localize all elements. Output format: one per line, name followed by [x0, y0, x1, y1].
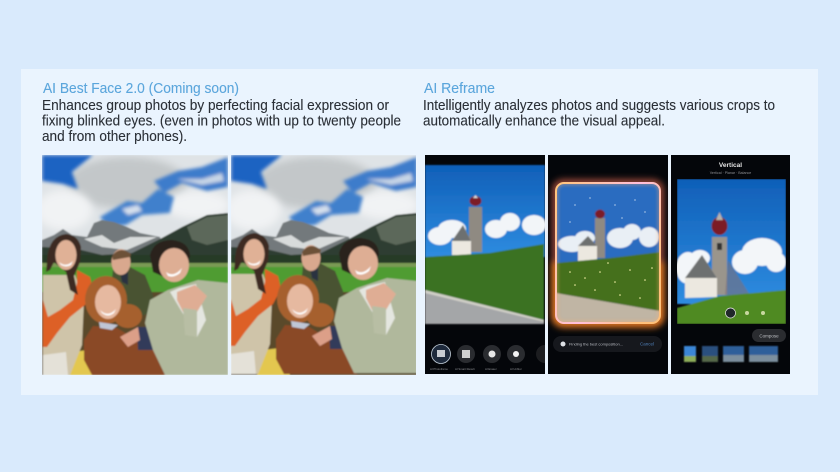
panel: feature card: [21, 69, 818, 395]
sparkle dots: [569, 197, 653, 299]
text block: AI Reframe description: [423, 98, 775, 130]
focus dots: [726, 308, 765, 318]
text block: AI Best Face description: Enhances group photos by perfecting facial expression or: [42, 98, 389, 114]
crop subtitle: Vertical · Planar · Balance: [710, 171, 751, 175]
icon row: AI tools: AI Unblur: [510, 367, 522, 371]
photo: group after: [225, 155, 418, 375]
compose button: Compose: [759, 334, 779, 338]
icon row: AI tools: AI Eraser: [485, 367, 497, 371]
icon row: AI tools: AI Photoframe: [430, 367, 448, 371]
text block: AI Best Face description: [42, 98, 401, 145]
photo: group before: [36, 155, 229, 375]
text block: AI Reframe description: Intelligently analyzes photos and suggests various crops to: [423, 98, 775, 114]
status pill: finding composition: Finding the best composition...: [569, 342, 623, 346]
crop thumbnails: [684, 346, 778, 362]
text block: AI Best Face description: and from other phones).: [42, 129, 187, 145]
phone: vertical crop screen: [671, 155, 790, 374]
status pill: finding composition: [553, 336, 662, 352]
icon row: AI tools: [430, 344, 545, 371]
status pill: finding composition: Cancel: [640, 342, 654, 346]
text block: AI Best Face description: fixing blinked eyes. (even in photos with up to twenty people: [42, 114, 401, 130]
glowing frame: [556, 183, 660, 323]
phone: finding composition screen: [548, 155, 668, 374]
crop title: Vertical: [719, 162, 742, 169]
phone: AI tools screen: [425, 155, 546, 374]
compose button: [752, 329, 786, 342]
heading: AI Reframe: AI Reframe: [424, 81, 495, 97]
icon row: AI tools: AI Smart Result: [455, 367, 475, 371]
text block: AI Reframe description: automatically enhance the visual appeal.: [423, 114, 665, 130]
heading: AI Best Face: AI Best Face 2.0 (Coming soon): [43, 81, 239, 97]
